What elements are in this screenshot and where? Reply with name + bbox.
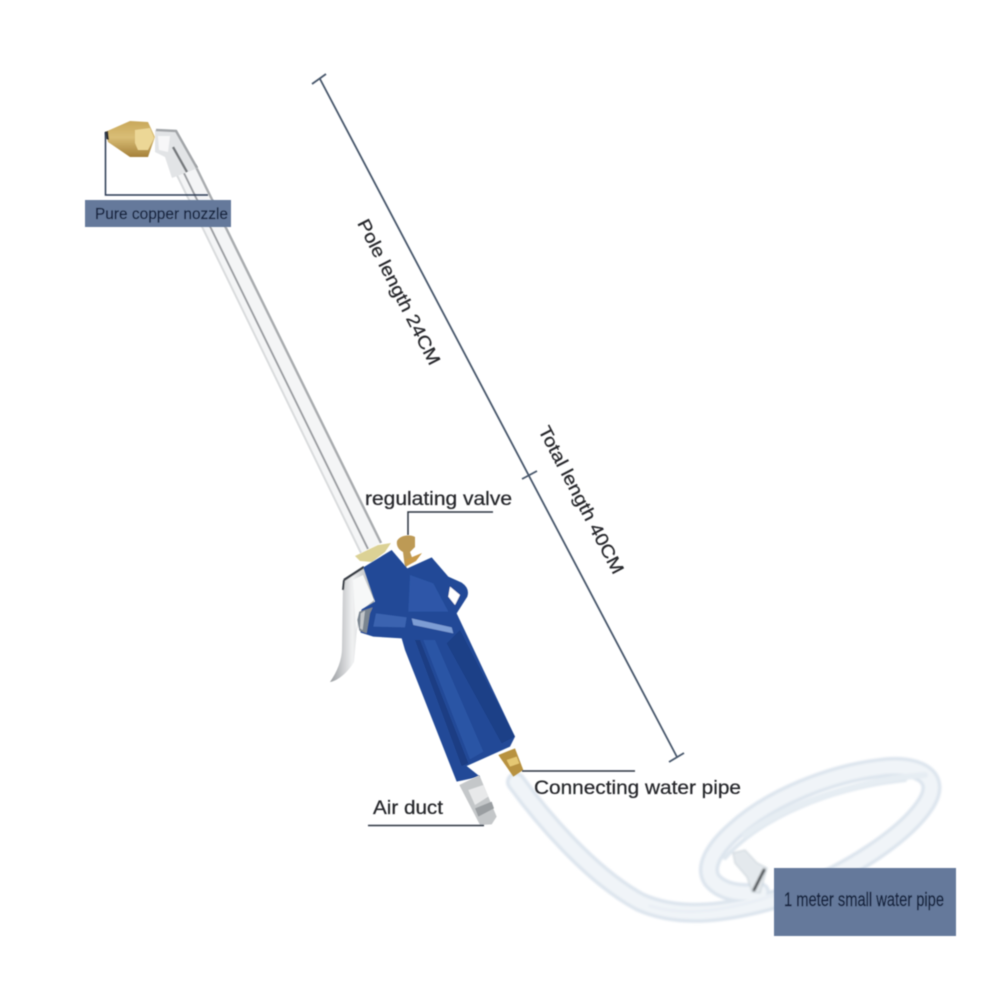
icon: spray pole — [171, 165, 381, 553]
label: pole length: Pole length 24CM — [353, 216, 444, 368]
label: total length: Total length 40CM — [534, 423, 628, 577]
callout: 1 meter small water pipe — [774, 868, 956, 936]
callout: air duct — [368, 798, 484, 826]
callout: pure copper nozzle — [85, 132, 231, 227]
dimension line: total length — [312, 74, 684, 762]
icon: copper nozzle — [105, 121, 155, 157]
icon: trigger lever — [330, 567, 375, 682]
icon: hose connector — [733, 850, 767, 893]
icon: water hose coil — [516, 767, 931, 913]
callout: pure copper nozzle: Pure copper nozzle — [95, 206, 228, 223]
callout: connecting water pipe: Connecting water pipe — [534, 778, 741, 799]
callout: regulating valve — [365, 489, 512, 535]
icon: brass collar — [355, 543, 391, 562]
callout: 1 meter small water pipe: 1 meter small water pipe — [784, 890, 944, 911]
icon: water pipe fitting — [498, 748, 523, 777]
icon: blue gun body — [357, 550, 515, 782]
icon: air duct connector — [459, 775, 497, 825]
icon: regulating valve knob — [397, 535, 422, 568]
callout: regulating valve: regulating valve — [365, 489, 512, 510]
icon: elbow fitting — [155, 130, 198, 178]
callout: air duct: Air duct — [373, 798, 444, 819]
